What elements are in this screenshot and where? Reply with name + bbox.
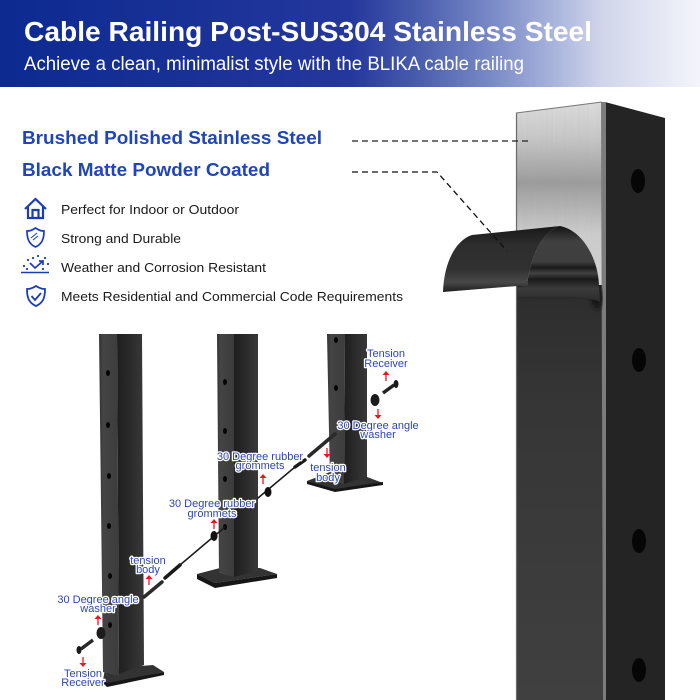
subtitle: Achieve a clean, minimalist style with the BLIKA cable railing bbox=[24, 53, 524, 75]
left hardware: receiver and washer bbox=[76, 627, 106, 654]
title: Cable Railing Post-SUS304 Stainless Steel bbox=[24, 16, 592, 47]
black lower face bbox=[516, 285, 604, 700]
heading: stainless steel: Brushed Polished Stainless Steel bbox=[22, 127, 322, 148]
text: weather: Weather and Corrosion Resistant bbox=[61, 260, 266, 275]
header banner bbox=[0, 0, 700, 87]
post corner edge bbox=[601, 102, 606, 700]
label: right tension receiver: Tension bbox=[367, 348, 405, 360]
large post closeup bbox=[443, 102, 665, 700]
dashed leader: powder coat bbox=[352, 172, 507, 251]
peeled coating curl bbox=[443, 226, 600, 302]
small post 3 bbox=[307, 334, 383, 492]
label: left washer: 30 Degree angle bbox=[57, 594, 139, 606]
text: strong and durable: Strong and Durable bbox=[61, 231, 181, 246]
label: right washer: 30 Degree angle bbox=[337, 420, 419, 432]
label: left tension body: tension bbox=[130, 555, 166, 567]
label: right tension body: body bbox=[316, 472, 340, 484]
icon: shield check bbox=[27, 286, 45, 306]
brushed stainless face bbox=[516, 102, 603, 290]
text: code requirements: Meets Residential and Commercial Code Requirements bbox=[61, 289, 404, 304]
icon: shield bbox=[27, 228, 44, 247]
post holes bbox=[631, 169, 646, 682]
icon: house bbox=[25, 199, 46, 218]
shadow under curl bbox=[591, 287, 603, 309]
small post 1 bbox=[99, 334, 164, 687]
label: right washer: washer bbox=[359, 429, 396, 441]
label: left tension receiver: Receiver bbox=[61, 677, 105, 689]
label: left washer: washer bbox=[79, 603, 116, 615]
post right face bbox=[605, 102, 665, 700]
dashed leader: stainless steel bbox=[352, 140, 531, 142]
small post 2 bbox=[197, 334, 277, 588]
red arrows bbox=[80, 371, 390, 667]
label: right tension body: tension bbox=[310, 462, 346, 474]
feature list bbox=[21, 199, 404, 306]
right hardware: receiver and washer bbox=[370, 380, 398, 406]
label: right rubber grommets: grommets bbox=[236, 460, 285, 472]
heading: powder coat: Black Matte Powder Coated bbox=[22, 159, 270, 180]
label: right rubber grommets: 30 Degree rubber bbox=[217, 451, 303, 463]
label: left tension body: body bbox=[136, 564, 160, 576]
cable assembly bbox=[144, 434, 335, 597]
label: left rubber grommets: grommets bbox=[188, 508, 237, 520]
label: left rubber grommets: 30 Degree rubber bbox=[169, 498, 255, 510]
icon: weather bbox=[21, 255, 49, 272]
label: left tension receiver: Tension bbox=[64, 668, 102, 680]
label: right tension receiver: Receiver bbox=[364, 358, 408, 370]
text: indoor outdoor: Perfect for Indoor or Outdoor bbox=[61, 202, 240, 217]
